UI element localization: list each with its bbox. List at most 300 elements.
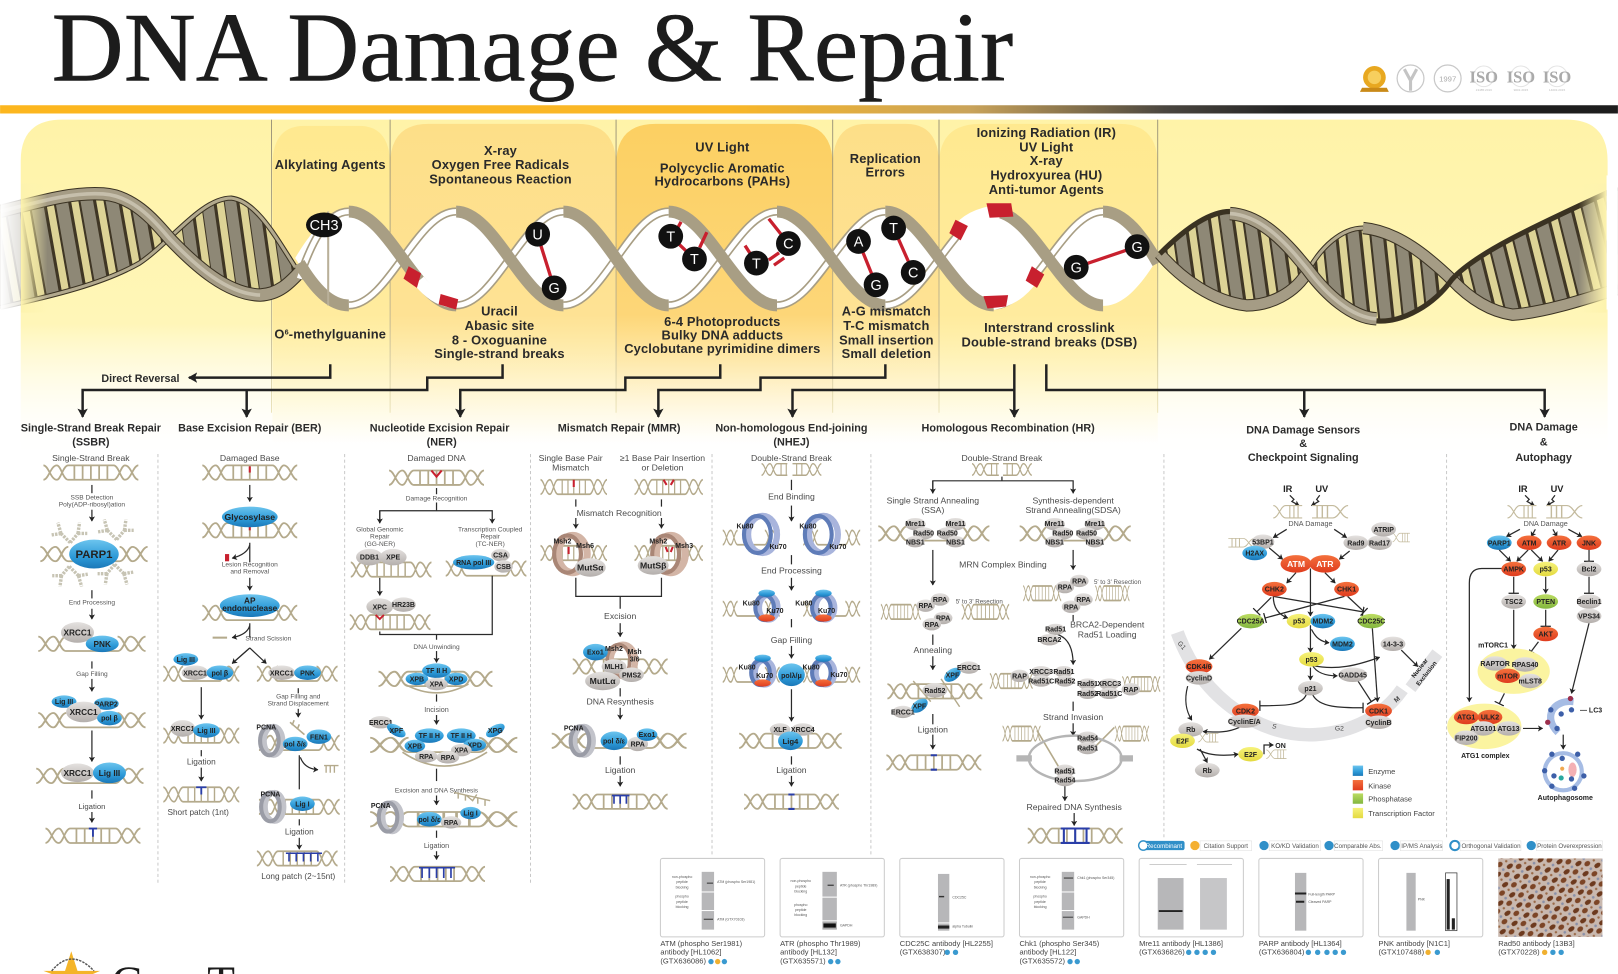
ATG1 complex: ATG13 [1498, 726, 1520, 733]
card: ATR: peptide [795, 908, 807, 912]
card: ATM: non-phospho [672, 875, 692, 879]
signaling arrows [1186, 529, 1418, 762]
RPA SSA [881, 593, 1009, 630]
kinases and effectors: Rb [1203, 768, 1212, 775]
kinases and effectors: CyclinE/A [1228, 719, 1261, 726]
long patch branch: Ligation [285, 828, 314, 837]
validation legend: KO/KD Validation [1271, 843, 1319, 850]
TFIIH open complex: XPD [449, 676, 463, 683]
mTORC1 complex: mTORC1 [1478, 642, 1508, 649]
incision complex: XPD [468, 743, 482, 750]
short patch branch: pol β [211, 670, 229, 677]
MutL alpha: 3/6 [630, 656, 640, 663]
XRCC1 Lig III: Lig III [99, 769, 120, 778]
synthesis complex [370, 803, 517, 832]
damage trigger [1508, 484, 1582, 528]
XRCC1 Lig III: XRCC1 [63, 769, 92, 778]
incision complex: TF II H [451, 733, 472, 740]
damaged base labels: T [889, 221, 898, 237]
cell cycle arc: G1 [1176, 640, 1187, 652]
Ku rings: Ku70 [769, 544, 787, 551]
TC-NER complexes: CSB [496, 564, 511, 571]
ATG1 complex: FIP200 [1455, 735, 1478, 742]
Lig4 complex: XRCC4 [791, 727, 815, 734]
phagophore with LC3 [1545, 696, 1602, 733]
TC-NER complexes [446, 549, 526, 576]
MutS beta: MutSβ [640, 561, 666, 571]
damage types: A-G mismatch [842, 304, 931, 319]
kinases and effectors: CyclinB [1366, 720, 1392, 727]
ATG1 complex [1447, 704, 1521, 760]
Rad52 annealing: Rad52 [924, 688, 945, 695]
card: ATM: ATM (phospho Ser1981) [717, 880, 755, 884]
incision complex: XPG [488, 728, 503, 735]
card: Chk1: non-phospho [1030, 875, 1050, 879]
card: Chk1: Chk1 (phospho Ser345) [1019, 939, 1100, 948]
card: Chk1: blocking [1034, 885, 1047, 889]
legend: Enzyme [1368, 767, 1395, 776]
cell cycle arc: Exclusion [1415, 660, 1439, 688]
panel: NER: DNA Unwinding [413, 644, 460, 651]
ATG1 complex: ATG101 [1470, 726, 1496, 733]
panel: SSBR: SSB Detection [70, 494, 114, 501]
pol lambda mu: Ku80 [739, 665, 756, 672]
MutS beta: Msh3 [675, 543, 693, 550]
direct reversal label: Direct Reversal [101, 373, 179, 385]
kinases and effectors: CDC25C [1357, 619, 1385, 626]
XRCC1 PNK [38, 622, 146, 652]
MRN SDSA: NBS1 [1085, 539, 1104, 546]
damage sources: Polycyclic Aromatic [660, 160, 785, 175]
resynthesis complex [552, 726, 687, 755]
long patch branch: Lig I [295, 801, 310, 808]
panel: NER: (GG-NER) [364, 541, 395, 548]
mTORC1 complex: mTOR [1497, 673, 1518, 680]
XRCC1 complex: Lig III [55, 699, 73, 706]
panel: MMR: Single Base Pair [539, 453, 603, 463]
panel: NER: Excision and DNA Synthesis [395, 787, 479, 794]
MRN SDSA: Rad50 [1076, 530, 1097, 537]
card: ATR [780, 858, 884, 966]
legend: Transcription Factor [1368, 809, 1435, 818]
synthesis complex: RPA [444, 820, 458, 827]
sensor proteins [1228, 522, 1410, 560]
MRN SSA: Mre11 [905, 521, 925, 528]
validation legend: Recombinant [1146, 843, 1182, 850]
Rad52 annealing: XPF [946, 672, 960, 679]
damage sources: Ionizing Radiation (IR) [977, 125, 1116, 140]
kinases and effectors: CDK1 [1369, 708, 1388, 715]
protein nodes: AKT [1538, 632, 1554, 639]
damage trigger [1273, 484, 1348, 528]
mTORC1 complex [1478, 642, 1550, 694]
damaged base labels: U [532, 227, 543, 243]
card: Rad50: (GTX70228) [1498, 947, 1540, 956]
kinases and effectors: CHK1 [1337, 587, 1356, 594]
Rad52 annealing: ERCC1 [957, 665, 981, 672]
TFIIH open complex: XPB [410, 676, 424, 683]
Ku rings: Ku80 [799, 523, 817, 530]
MutS beta: Msh2 [649, 539, 667, 546]
heading: autophagy: DNA Damage [1510, 421, 1578, 433]
icon: since 1997 [1434, 65, 1461, 92]
heading: sensors: Checkpoint Signaling [1248, 452, 1359, 464]
damaged base labels: T [752, 256, 761, 272]
RPA SDSA: RPA [1058, 585, 1072, 592]
damage types: Small deletion [842, 346, 931, 361]
short patch branch: XRCC1 [183, 670, 207, 677]
kinases and effectors: ON [1275, 743, 1286, 750]
card: Chk1: peptide [1034, 900, 1046, 904]
strand invasion structure [1003, 726, 1149, 786]
ATG1 complex: ULK2 [1481, 715, 1499, 722]
GG-NER complexes: XPC [373, 604, 387, 611]
icon: ISO 14001: ISO [1543, 68, 1571, 87]
protein nodes [1487, 535, 1602, 641]
loading complex: Rad51C [1096, 691, 1122, 698]
loading complex: Rad51 [1077, 681, 1098, 688]
PARP1 on DNA: PARP1 [76, 549, 112, 561]
heading: SSBR: (SSBR) [72, 437, 110, 449]
legend [1353, 766, 1435, 818]
MutL alpha [573, 644, 668, 690]
synthesis complex: pol δ/ε [418, 817, 441, 824]
column dividers [158, 454, 1447, 884]
panel: NHEJ: End Processing [761, 566, 822, 576]
MRN SSA [878, 518, 989, 547]
damaged base labels: G [1131, 240, 1143, 256]
textured helix right [1146, 175, 1618, 325]
incision complex: XPA [454, 748, 468, 755]
kinases and effectors: CDK2 [1236, 708, 1255, 715]
MutS alpha: Msh6 [576, 543, 594, 550]
card: PNK: PNK [1418, 898, 1426, 902]
card: PARP: (GTX636804) [1259, 947, 1305, 956]
validation legend: Comparable Abs. [1334, 843, 1382, 850]
DNA helix [0, 175, 1618, 325]
damage sources: Spontaneous Reaction [429, 172, 572, 187]
MutL alpha: Msh [628, 649, 642, 656]
MutS alpha: MutSα [577, 563, 604, 573]
icon: since 1997: 1997 [1439, 75, 1456, 84]
card: Rad50: Rad50 antibody [13B3] [1498, 939, 1575, 948]
panel: HR: Repaired DNA Synthesis [1027, 802, 1122, 812]
short patch branch: XRCC1 [171, 726, 195, 733]
card: ATR: (GTX635571) [780, 957, 826, 966]
damage types: Single-strand breaks [434, 346, 565, 361]
GG-NER complexes: DDB1 [360, 555, 379, 562]
MRN SDSA: Rad50 [1052, 530, 1073, 537]
card: ATR: GAPDH [840, 924, 853, 928]
damaged base labels [525, 216, 1149, 300]
Ku Artemis: Ku70 [818, 608, 835, 615]
damage sources: X-ray [484, 143, 518, 158]
sensor proteins: H2AX [1245, 551, 1264, 558]
pol lambda mu: Ku70 [830, 672, 848, 679]
panel: NER: Global Genomic [356, 526, 404, 533]
Ku Artemis: Ku80 [743, 601, 760, 608]
heading: autophagy [1510, 421, 1578, 464]
excised fragment [454, 792, 490, 806]
panel: checkpoint signaling [1170, 424, 1439, 818]
panel: MMR: Ligation [605, 765, 636, 775]
icon: star logo [43, 951, 100, 974]
panel: BER: and Removal [230, 569, 270, 576]
long patch branch: PNK [300, 670, 315, 677]
repaired DNA [45, 829, 140, 843]
MutL alpha: PMS2 [622, 672, 641, 679]
long patch branch [256, 665, 340, 881]
kinases and effectors: E2F [1244, 752, 1258, 759]
heading: NHEJ [715, 422, 868, 449]
panel: SSBR [21, 422, 162, 843]
damaged base labels: A [854, 235, 864, 251]
short patch branch: Short patch (1nt) [167, 808, 229, 817]
header bar [0, 105, 1618, 113]
card: Chk1: phospho [1033, 895, 1047, 899]
mTORC1 complex: mLST8 [1519, 679, 1542, 686]
Lig4 complex: XLF [773, 727, 787, 734]
red bonds [538, 219, 1137, 288]
damage types: Interstrand crosslink [984, 320, 1115, 335]
kinases and effectors: ATM [1287, 559, 1305, 569]
heading: sensors [1246, 424, 1360, 464]
panel: HR: Strand Invasion [1043, 712, 1103, 722]
card: ATM: blocking [676, 885, 689, 889]
kinases and effectors: CDK4/6 [1187, 664, 1212, 671]
PARP1 on DNA [40, 520, 148, 587]
GG-NER complexes [350, 549, 431, 629]
short patch branch: Lig III [177, 657, 195, 664]
protein nodes: ATR [1552, 540, 1566, 547]
pol lambda mu: Ku70 [756, 673, 773, 680]
loading complex: XRCC3 [1097, 681, 1121, 688]
XRCC1 Lig III [36, 762, 143, 783]
Rad51 loading: Rad51 Loading [1078, 630, 1137, 640]
damage sources: Alkylating Agents [275, 157, 386, 172]
MRN SDSA: Mre11 [1085, 521, 1105, 528]
panel: NHEJ [715, 422, 868, 809]
icon: ISO 13485: ISO [1470, 68, 1498, 87]
TC-NER complexes: CSA [493, 553, 508, 560]
damage types: 6 [285, 327, 289, 336]
Ku rings: Ku80 [736, 523, 754, 530]
card: ATM [660, 858, 765, 966]
sensor proteins: Rad9 [1347, 540, 1365, 547]
XRCC1 PNK: PNK [94, 640, 111, 649]
card: ATR: non-phospho [791, 879, 811, 883]
kinases and effectors: p53 [1305, 657, 1318, 664]
card: ATR: ATR (phospho Thr1989) [840, 883, 877, 887]
loading complex: Rad52 [1054, 679, 1075, 686]
loading complex: Rad52 [1077, 691, 1098, 698]
panel: HR: Single Strand Annealing [887, 496, 979, 506]
resynthesis complex: RPA [631, 741, 645, 748]
XRCC1 complex: XRCC1 [70, 708, 98, 717]
kinases and effectors: 14-3-3 [1383, 641, 1403, 648]
heading: autophagy: Autophagy [1515, 452, 1572, 464]
validation legend [1139, 841, 1602, 851]
long patch branch: XRCC1 [270, 670, 294, 677]
card: CDC25C: (GTX638307) [900, 947, 946, 956]
damaged base labels: C [908, 266, 918, 282]
TFIIH open complex: XPA [430, 682, 443, 689]
damage trigger: DNA Damage [1288, 519, 1333, 528]
GG-NER complexes: HR23B [392, 602, 415, 609]
kinases and effectors: E2F [1176, 738, 1190, 745]
card: ATR: blocking [794, 889, 807, 893]
panel: MMR: DNA Resynthesis [587, 697, 655, 707]
Ku rings [723, 516, 860, 553]
icon: ISO 9001: 9001:2015 [1514, 88, 1528, 92]
card: ATR: peptide [795, 884, 807, 888]
MutL alpha: Msh2 [605, 646, 623, 653]
abasic site gaps [404, 266, 458, 310]
RPA SDSA: RPA [1076, 597, 1091, 604]
strand invasion structure: Rad51 [1077, 746, 1098, 753]
TFIIH open complex [379, 663, 492, 693]
card: CDC25C [900, 858, 1004, 956]
long patch branch: Long patch (2~15nt) [261, 872, 336, 881]
cell cycle arc: G2 [1335, 725, 1344, 732]
protein nodes: Bcl2 [1582, 567, 1597, 574]
card: PARP: PARP antibody [HL1364] [1259, 939, 1342, 948]
panel: BER: Damaged Base [220, 453, 280, 463]
incision complex: RPA [441, 755, 455, 762]
damage sources: UV Light [695, 140, 750, 155]
card: ATM: peptide [676, 880, 688, 884]
panel: BER: Strand Scission [245, 636, 292, 643]
panel: HR: Double-Strand Break [962, 453, 1043, 463]
pathway arrows [1469, 529, 1589, 749]
protein nodes: VPS34 [1578, 614, 1600, 621]
heading: HR: Homologous Recombination (HR) [922, 422, 1095, 434]
heading: sensors: & [1299, 438, 1307, 450]
icon: antibody [1397, 65, 1424, 92]
kinases and effectors: MDM2 [1332, 641, 1353, 648]
panel: NER: Transcription Coupled [458, 526, 523, 533]
base: CH3 [306, 213, 342, 237]
panel: HR: Synthesis-dependent [1032, 496, 1114, 506]
MRN SDSA: Mre11 [1045, 521, 1065, 528]
sensor proteins: Rad17 [1369, 540, 1390, 547]
heading: NHEJ: Non-homologous End-joining [715, 422, 868, 434]
card: ATR: antibody [HL132] [780, 947, 837, 956]
damage trigger: UV [1551, 484, 1564, 494]
TFIIH open complex: TF II H [426, 668, 447, 675]
MRN SDSA [1020, 518, 1131, 547]
damage types: 8 - Oxoguanine [452, 333, 547, 348]
heading: sensors: DNA Damage Sensors [1246, 424, 1360, 436]
panel: NER: Repair [480, 534, 501, 541]
RPA SSA: RPA [918, 603, 933, 610]
long patch branch: pol δ/ε [284, 741, 307, 748]
damage sources: Hydroxyurea (HU) [990, 168, 1102, 183]
protein nodes: PTEN [1536, 599, 1555, 606]
card: ATM: (GTX636086) [660, 957, 706, 966]
RPA SSA: 5' to 3' Resection [956, 599, 1003, 606]
damaged base labels: C [783, 237, 794, 253]
short patch branch: Ligation [187, 758, 216, 767]
damaged base labels: T [690, 252, 699, 268]
card: CDC25C: alpha Tubulin [952, 925, 973, 929]
incision complex: XPB [408, 744, 422, 751]
AP endonuclease [202, 594, 297, 620]
damage types: Uracil [481, 304, 518, 319]
panel: MMR [539, 422, 705, 809]
RPA SSA: RPA [933, 597, 947, 604]
heading: NER [370, 422, 510, 449]
panel: NER: (TC-NER) [476, 541, 505, 548]
card: ATM: ATM (GTX70103) [717, 917, 745, 921]
Ku rings: Ku70 [829, 544, 847, 551]
Ku Artemis: Ku70 [766, 608, 784, 615]
panel: HR [878, 422, 1160, 843]
pol lambda mu: polλ/μ [781, 672, 802, 680]
damaged base labels: T [666, 229, 675, 245]
card: PNK [1379, 858, 1483, 956]
card: PARP [1259, 858, 1363, 956]
card: Chk1: antibody [HL122] [1019, 947, 1076, 956]
short patch branch [163, 653, 239, 817]
textured helix left [0, 187, 302, 312]
panel: NER [350, 422, 526, 881]
validation legend: Citation Support [1204, 843, 1248, 850]
legend: Kinase [1368, 781, 1391, 790]
damage types: Cyclobutane pyrimidine dimers [624, 341, 820, 356]
card: PNK: (GTX107488) [1379, 947, 1425, 956]
card: ATR: phospho [794, 903, 808, 907]
arrows: damage to repair pathways [83, 364, 1545, 417]
ATG1 complex: ATG1 [1457, 715, 1475, 722]
panel: NHEJ: Ligation [776, 765, 807, 775]
Rad51 loading: BRCA2 [1037, 637, 1062, 644]
RPA SDSA: RPA [1072, 578, 1086, 585]
loading complex: Rad51C [1028, 679, 1054, 686]
XRCC1 PNK: XRCC1 [63, 629, 92, 638]
panel: SSBR: Single-Strand Break [52, 453, 130, 463]
Glycosylase [202, 507, 297, 538]
MutS alpha [541, 535, 607, 577]
RPA SDSA: 5' to 3' Resection [1094, 579, 1142, 586]
Rad51 loading: BRCA2-Dependent [1070, 619, 1145, 629]
AP endonuclease: AP [244, 597, 256, 606]
panel: MMR: Mismatch Recognition [577, 508, 662, 518]
kinases and effectors: GADD45 [1339, 672, 1367, 679]
Rad52 annealing [887, 661, 982, 718]
RPA SDSA [1023, 575, 1142, 613]
loading complex: XRCC3 [1029, 669, 1053, 676]
cell cycle arc [1176, 632, 1439, 735]
damaged base labels: G [1071, 260, 1082, 276]
heading: autophagy: & [1540, 437, 1548, 449]
synthesis complex: Lig I [463, 811, 478, 818]
cell cycle arc: S [1272, 723, 1277, 730]
card: CDC25C: CDC25C antibody [HL2255] [900, 939, 993, 948]
MutS beta [635, 535, 703, 575]
autophagosome: Autophagosome [1538, 795, 1593, 802]
card: PARP: Full-length PARP [1308, 893, 1336, 897]
damage types: O [274, 326, 285, 341]
validation legend: Orthogonal Validation [1461, 843, 1521, 850]
kinases and effectors: CDC25A [1237, 619, 1265, 626]
RPA SSA: RPA [936, 616, 950, 623]
pol lambda mu: Ku80 [803, 665, 820, 672]
panel: SSBR: Gap Filling [76, 671, 108, 678]
Rad51 loading [1037, 615, 1145, 664]
RPA SSA: RPA [925, 622, 939, 629]
cell cycle arc: M [1393, 695, 1402, 704]
